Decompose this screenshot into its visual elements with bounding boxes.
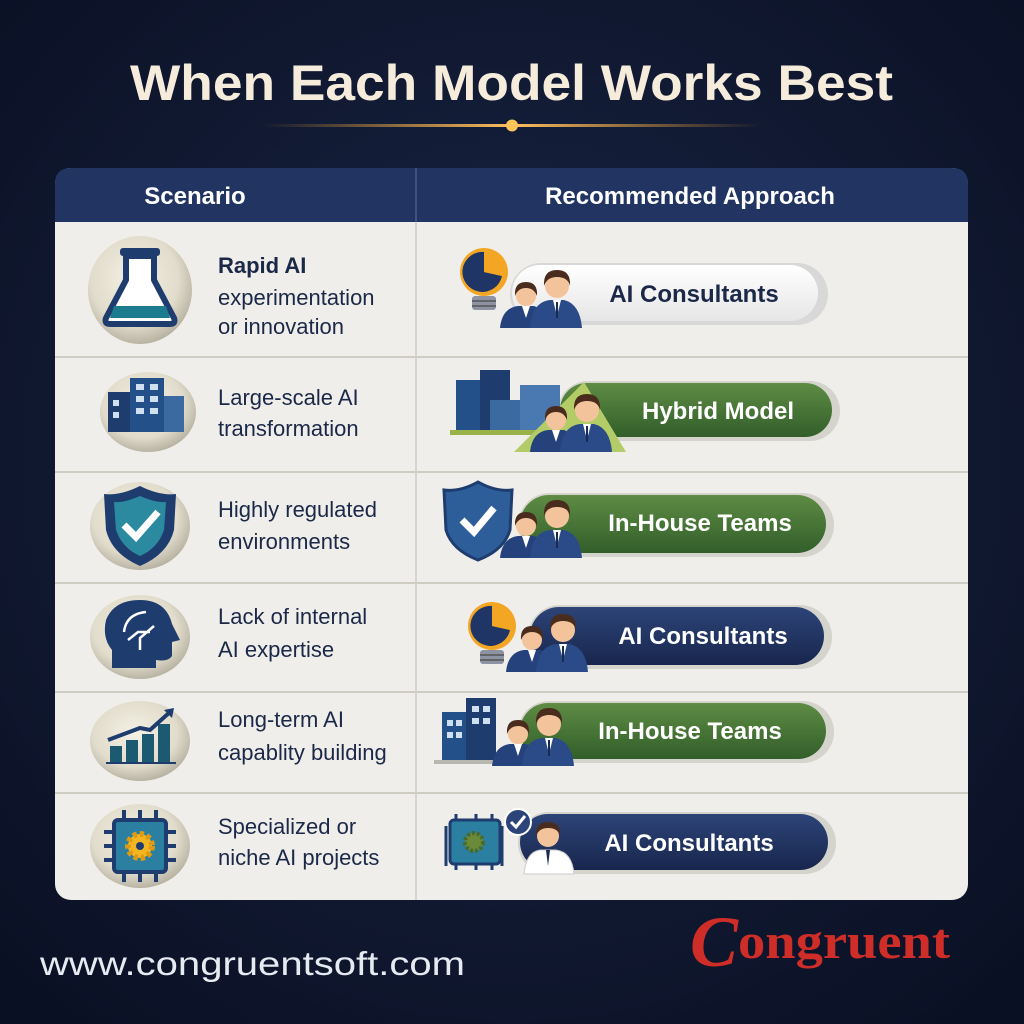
table header: Scenario	[144, 183, 246, 210]
pill: AI Consultants (white)	[460, 248, 828, 328]
pill: AI Consultants (navy): AI Consultants	[604, 830, 774, 857]
icon: shield	[90, 482, 190, 570]
row 3	[90, 482, 834, 570]
title: When Each Model Works Best	[130, 55, 893, 111]
pill: AI Consultants (white): AI Consultants	[609, 281, 779, 308]
pill: In-House Teams	[444, 482, 834, 560]
row 6: niche AI projects	[218, 845, 379, 870]
pill: Hybrid Model	[450, 370, 840, 452]
row 5	[90, 698, 834, 781]
row 1: rapid AI	[88, 236, 828, 344]
table header	[55, 168, 968, 222]
table header: Recommended Approach	[545, 183, 835, 210]
footer: website: www.congruentsoft.com	[39, 945, 465, 982]
row 4	[90, 595, 832, 679]
pill: In-House Teams	[434, 698, 834, 766]
pill: In-House Teams: In-House Teams	[598, 718, 782, 745]
row 1: rapid AI: experimentation	[218, 285, 375, 310]
row 3: Highly regulated	[218, 497, 377, 522]
footer: logo: C	[690, 902, 739, 982]
icon: growth chart	[90, 701, 190, 781]
pill: AI Consultants (navy)	[468, 602, 832, 672]
pill: In-House Teams: In-House Teams	[608, 510, 792, 537]
row 5: capablity building	[218, 740, 387, 765]
title glow line	[262, 120, 762, 132]
row 1: rapid AI: or innovation	[218, 314, 344, 339]
row 2: transformation	[218, 416, 359, 441]
row 5: Long-term AI	[218, 707, 344, 732]
icon: chip with gear	[90, 804, 190, 888]
icon: head with circuits	[90, 595, 190, 679]
row 4: Lack of internal	[218, 604, 367, 629]
table	[55, 168, 968, 900]
row 2	[100, 370, 840, 452]
pill: Hybrid Model: Hybrid Model	[642, 398, 794, 425]
footer: logo: ongruent	[738, 913, 950, 969]
row 6: Specialized or	[218, 814, 356, 839]
row 1: rapid AI: Rapid AI	[218, 253, 306, 278]
row 4: AI expertise	[218, 637, 334, 662]
row 3: environments	[218, 529, 350, 554]
row 6	[90, 804, 836, 888]
pill: AI Consultants (navy)	[446, 809, 836, 874]
icon: buildings	[100, 372, 196, 452]
pill: AI Consultants (navy): AI Consultants	[618, 623, 788, 650]
icon: flask	[88, 236, 192, 344]
row 2: Large-scale AI	[218, 385, 359, 410]
